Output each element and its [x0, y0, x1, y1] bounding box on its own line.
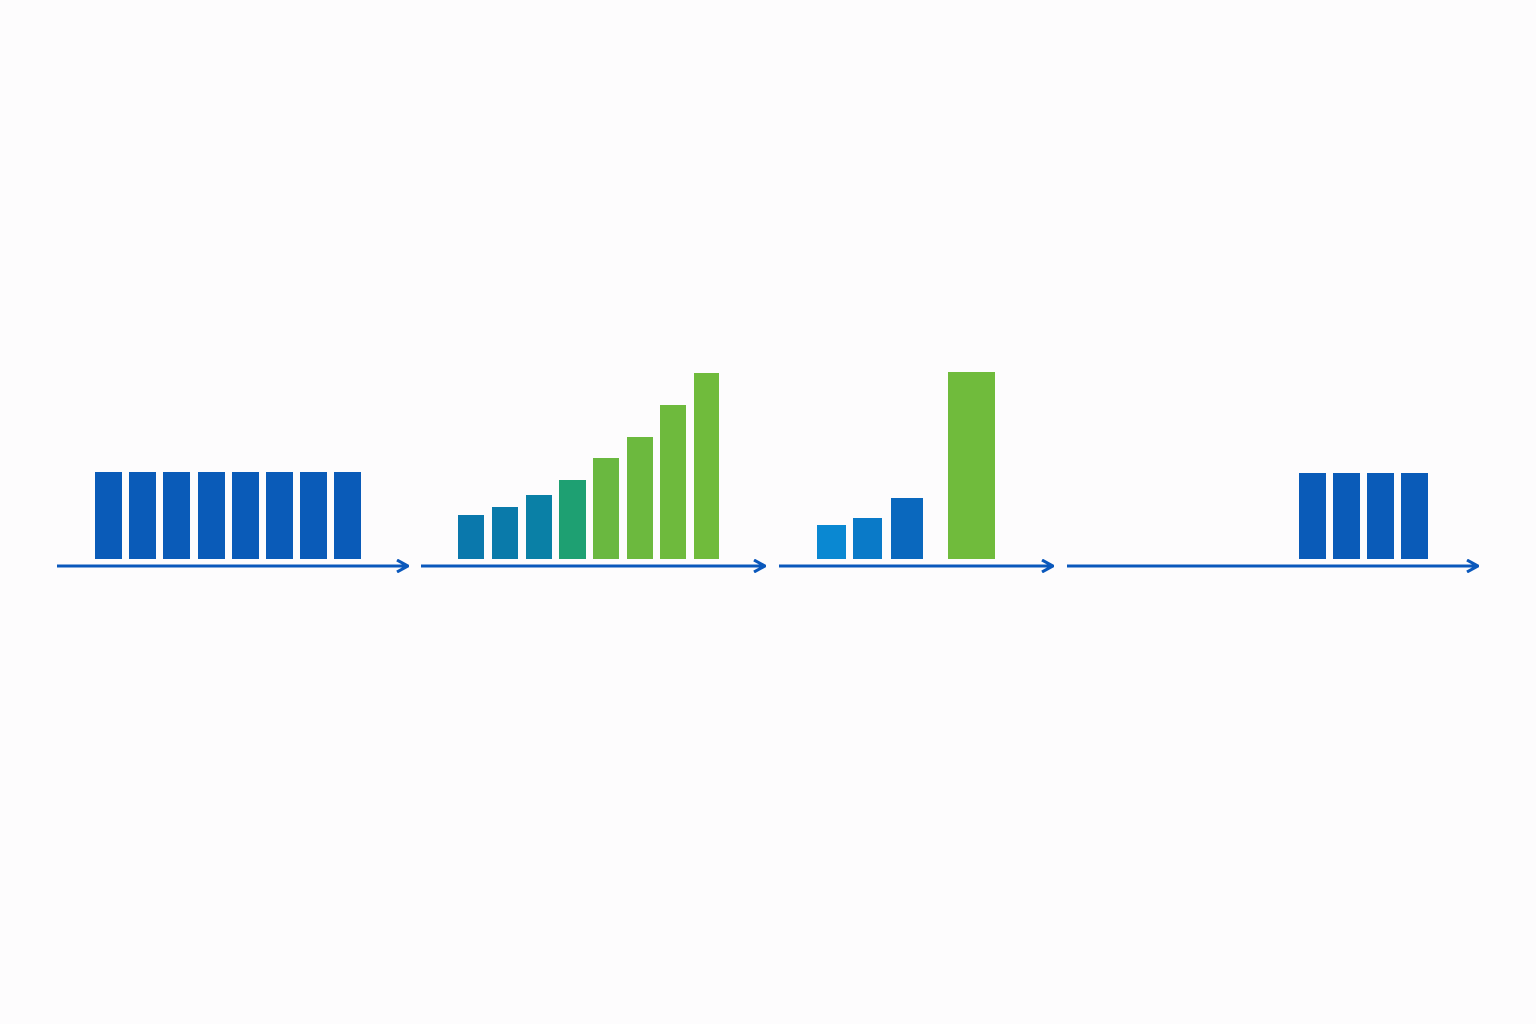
panel: late uniform bars: [1067, 473, 1477, 566]
arrow: timeline 3: [779, 564, 1052, 568]
arrow: timeline 4: [1067, 564, 1477, 568]
bars: four equal blue bars: [1299, 473, 1428, 559]
arrow: timeline 2: [421, 564, 764, 568]
panel: growing bars: [421, 373, 764, 566]
arrow: timeline 1: [57, 564, 407, 568]
bars: eight equal blue bars: [95, 472, 361, 559]
bars: three small blue and one tall green: [817, 372, 995, 559]
bars: increasing heights blue to green: [458, 373, 719, 559]
panel: spike: [779, 372, 1052, 566]
panel: steady uniform bars: [57, 472, 407, 566]
